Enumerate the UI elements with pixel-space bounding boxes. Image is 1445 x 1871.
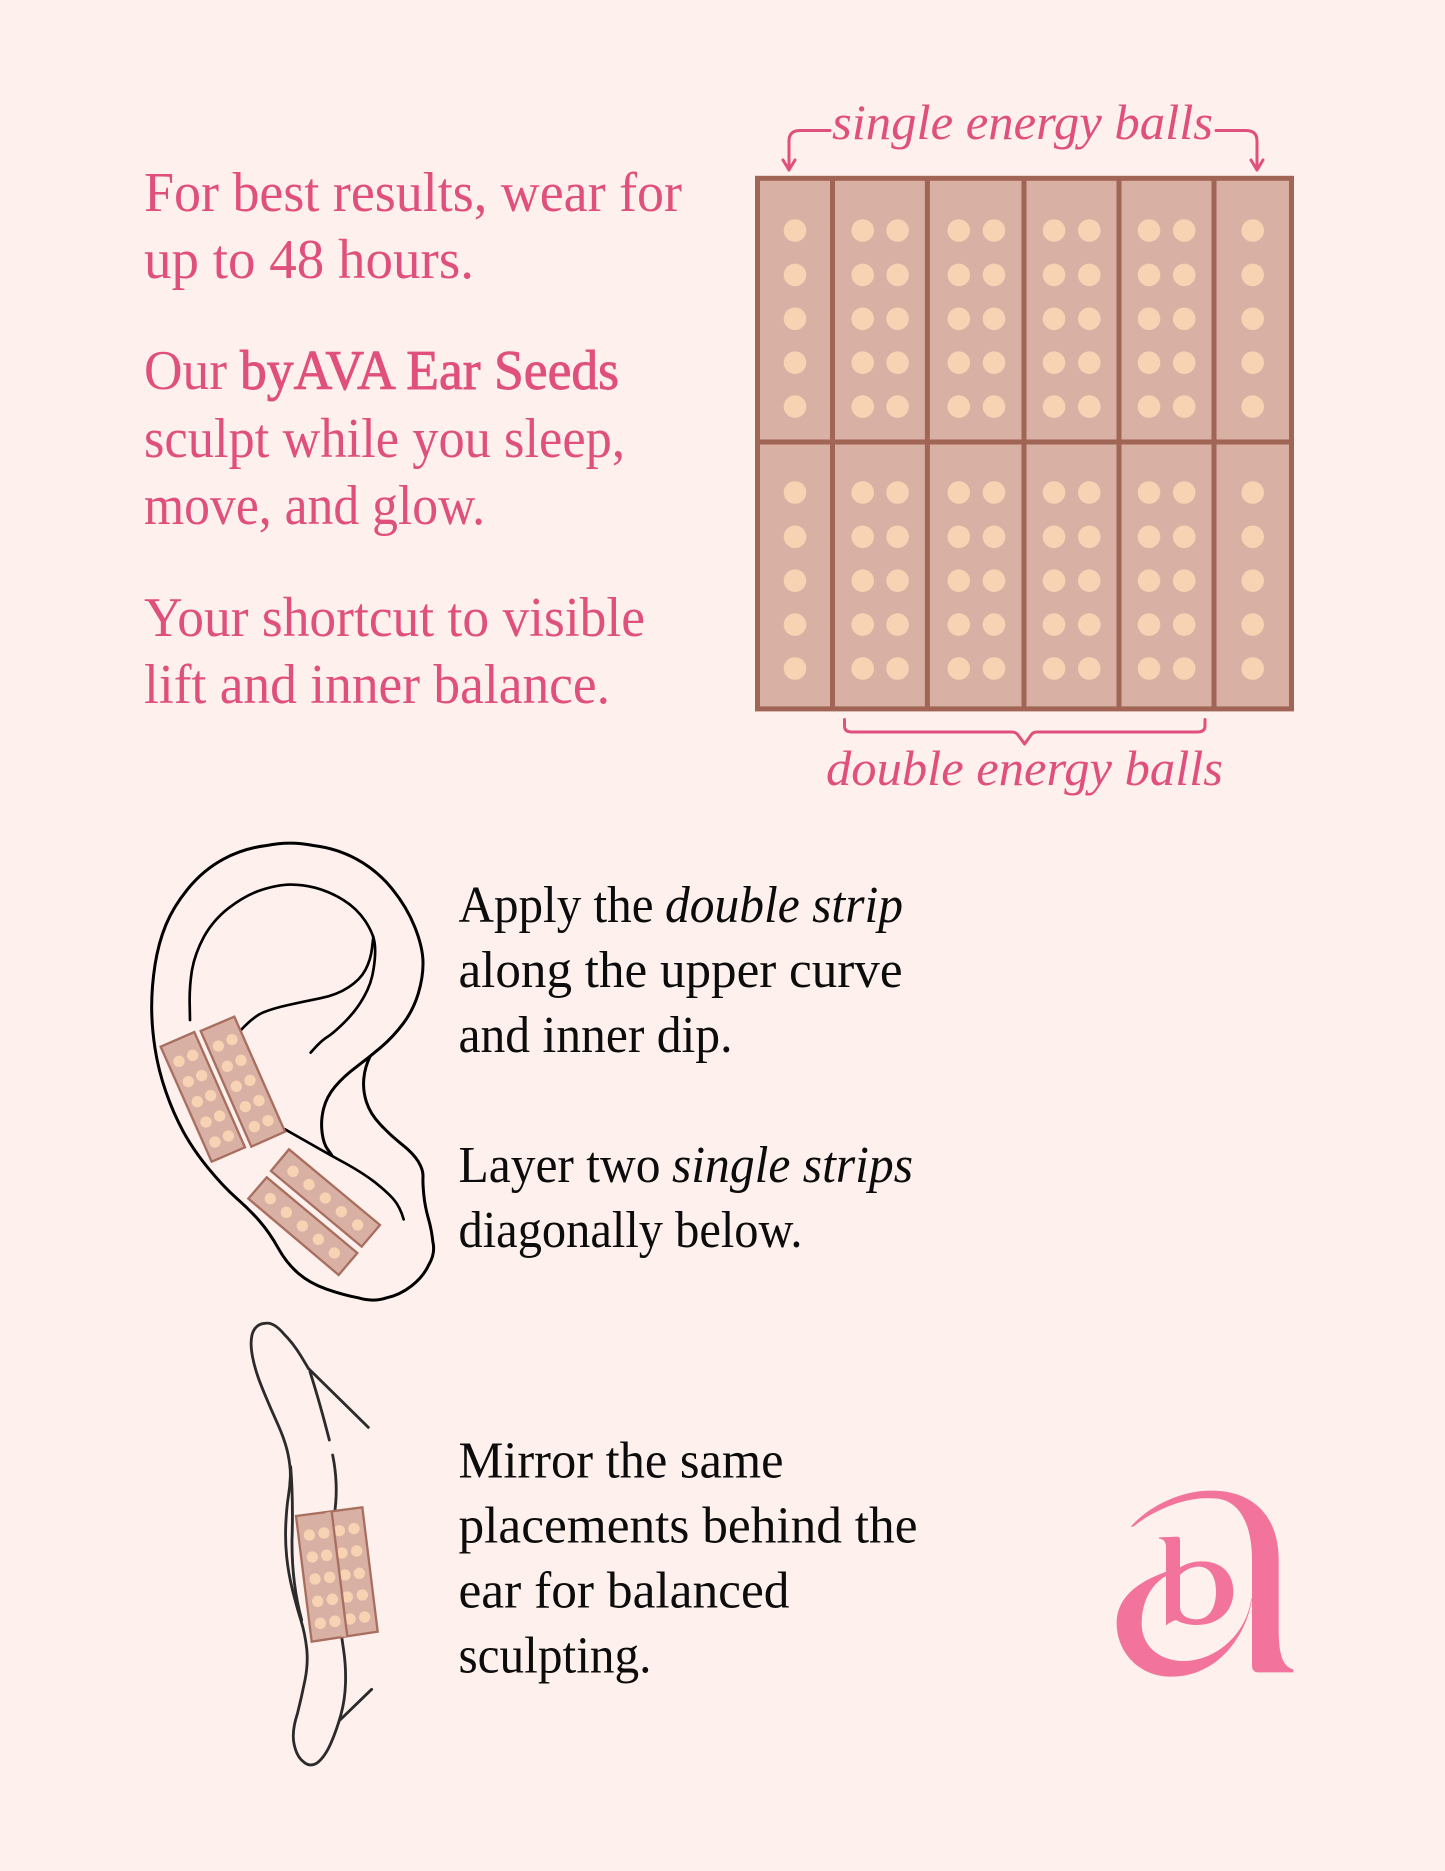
instruction text: mirror behind the ear [458, 1432, 918, 1684]
instruction text: double strip: double strip [665, 877, 903, 934]
brace: double energy balls [844, 720, 1205, 744]
arrow: left single energy balls [783, 130, 830, 170]
double strip right [201, 1017, 285, 1147]
intro text: wear time: up to 48 hours. [144, 229, 474, 291]
intro text: product description: sculpt while you sleep, [144, 408, 625, 470]
paired strips [296, 1507, 378, 1642]
instruction text: mirror behind the ear: placements behind the [458, 1498, 918, 1554]
strip dividers [757, 178, 1292, 709]
instruction text: mirror behind the ear: sculpting. [458, 1628, 652, 1684]
instruction text: double strip [458, 877, 903, 1064]
intro text: benefit [144, 587, 645, 716]
intro text: product description: Our [144, 340, 227, 402]
instruction text: double strip: and inner dip. [458, 1007, 732, 1064]
instruction text: single strips [458, 1137, 913, 1259]
logo: byAVA monogram [1117, 1491, 1293, 1677]
instruction text: single strips: Layer two [458, 1137, 660, 1194]
intro text: benefit: Your shortcut to visible [144, 587, 645, 649]
instruction text: single strips: diagonally below. [458, 1202, 802, 1259]
intro text: benefit: lift and inner balance. [144, 654, 610, 716]
intro text: wear time: For best results, wear for [144, 162, 682, 224]
ear outline [152, 843, 434, 1300]
instruction text: mirror behind the ear: Mirror the same [458, 1432, 784, 1490]
instruction text: mirror behind the ear: ear for balanced [458, 1562, 790, 1620]
back of ear outline [251, 1323, 372, 1765]
energy balls [784, 219, 1264, 680]
instruction text: single strips: single strips [672, 1137, 913, 1194]
instruction text: double strip: Apply the [458, 877, 654, 934]
arrow: right single energy balls [1216, 130, 1263, 170]
label: double energy balls: double energy balls [826, 740, 1223, 796]
illustration: back of ear with strips [251, 1323, 378, 1765]
sheet backing [758, 178, 1292, 709]
label: single energy balls: single energy balls [832, 94, 1213, 150]
single strip upper [271, 1149, 380, 1247]
double strip left [161, 1032, 245, 1162]
intro text: product description [144, 340, 625, 537]
single strip lower [248, 1177, 357, 1275]
intro text: product description: byAVA Ear Seeds [240, 340, 619, 402]
intro text: product description: move, and glow. [144, 475, 485, 537]
illustration: front of ear with strips [152, 843, 434, 1300]
instruction text: double strip: along the upper curve [458, 942, 902, 999]
intro text: wear time [144, 162, 682, 291]
ear seed sheet [757, 178, 1292, 709]
